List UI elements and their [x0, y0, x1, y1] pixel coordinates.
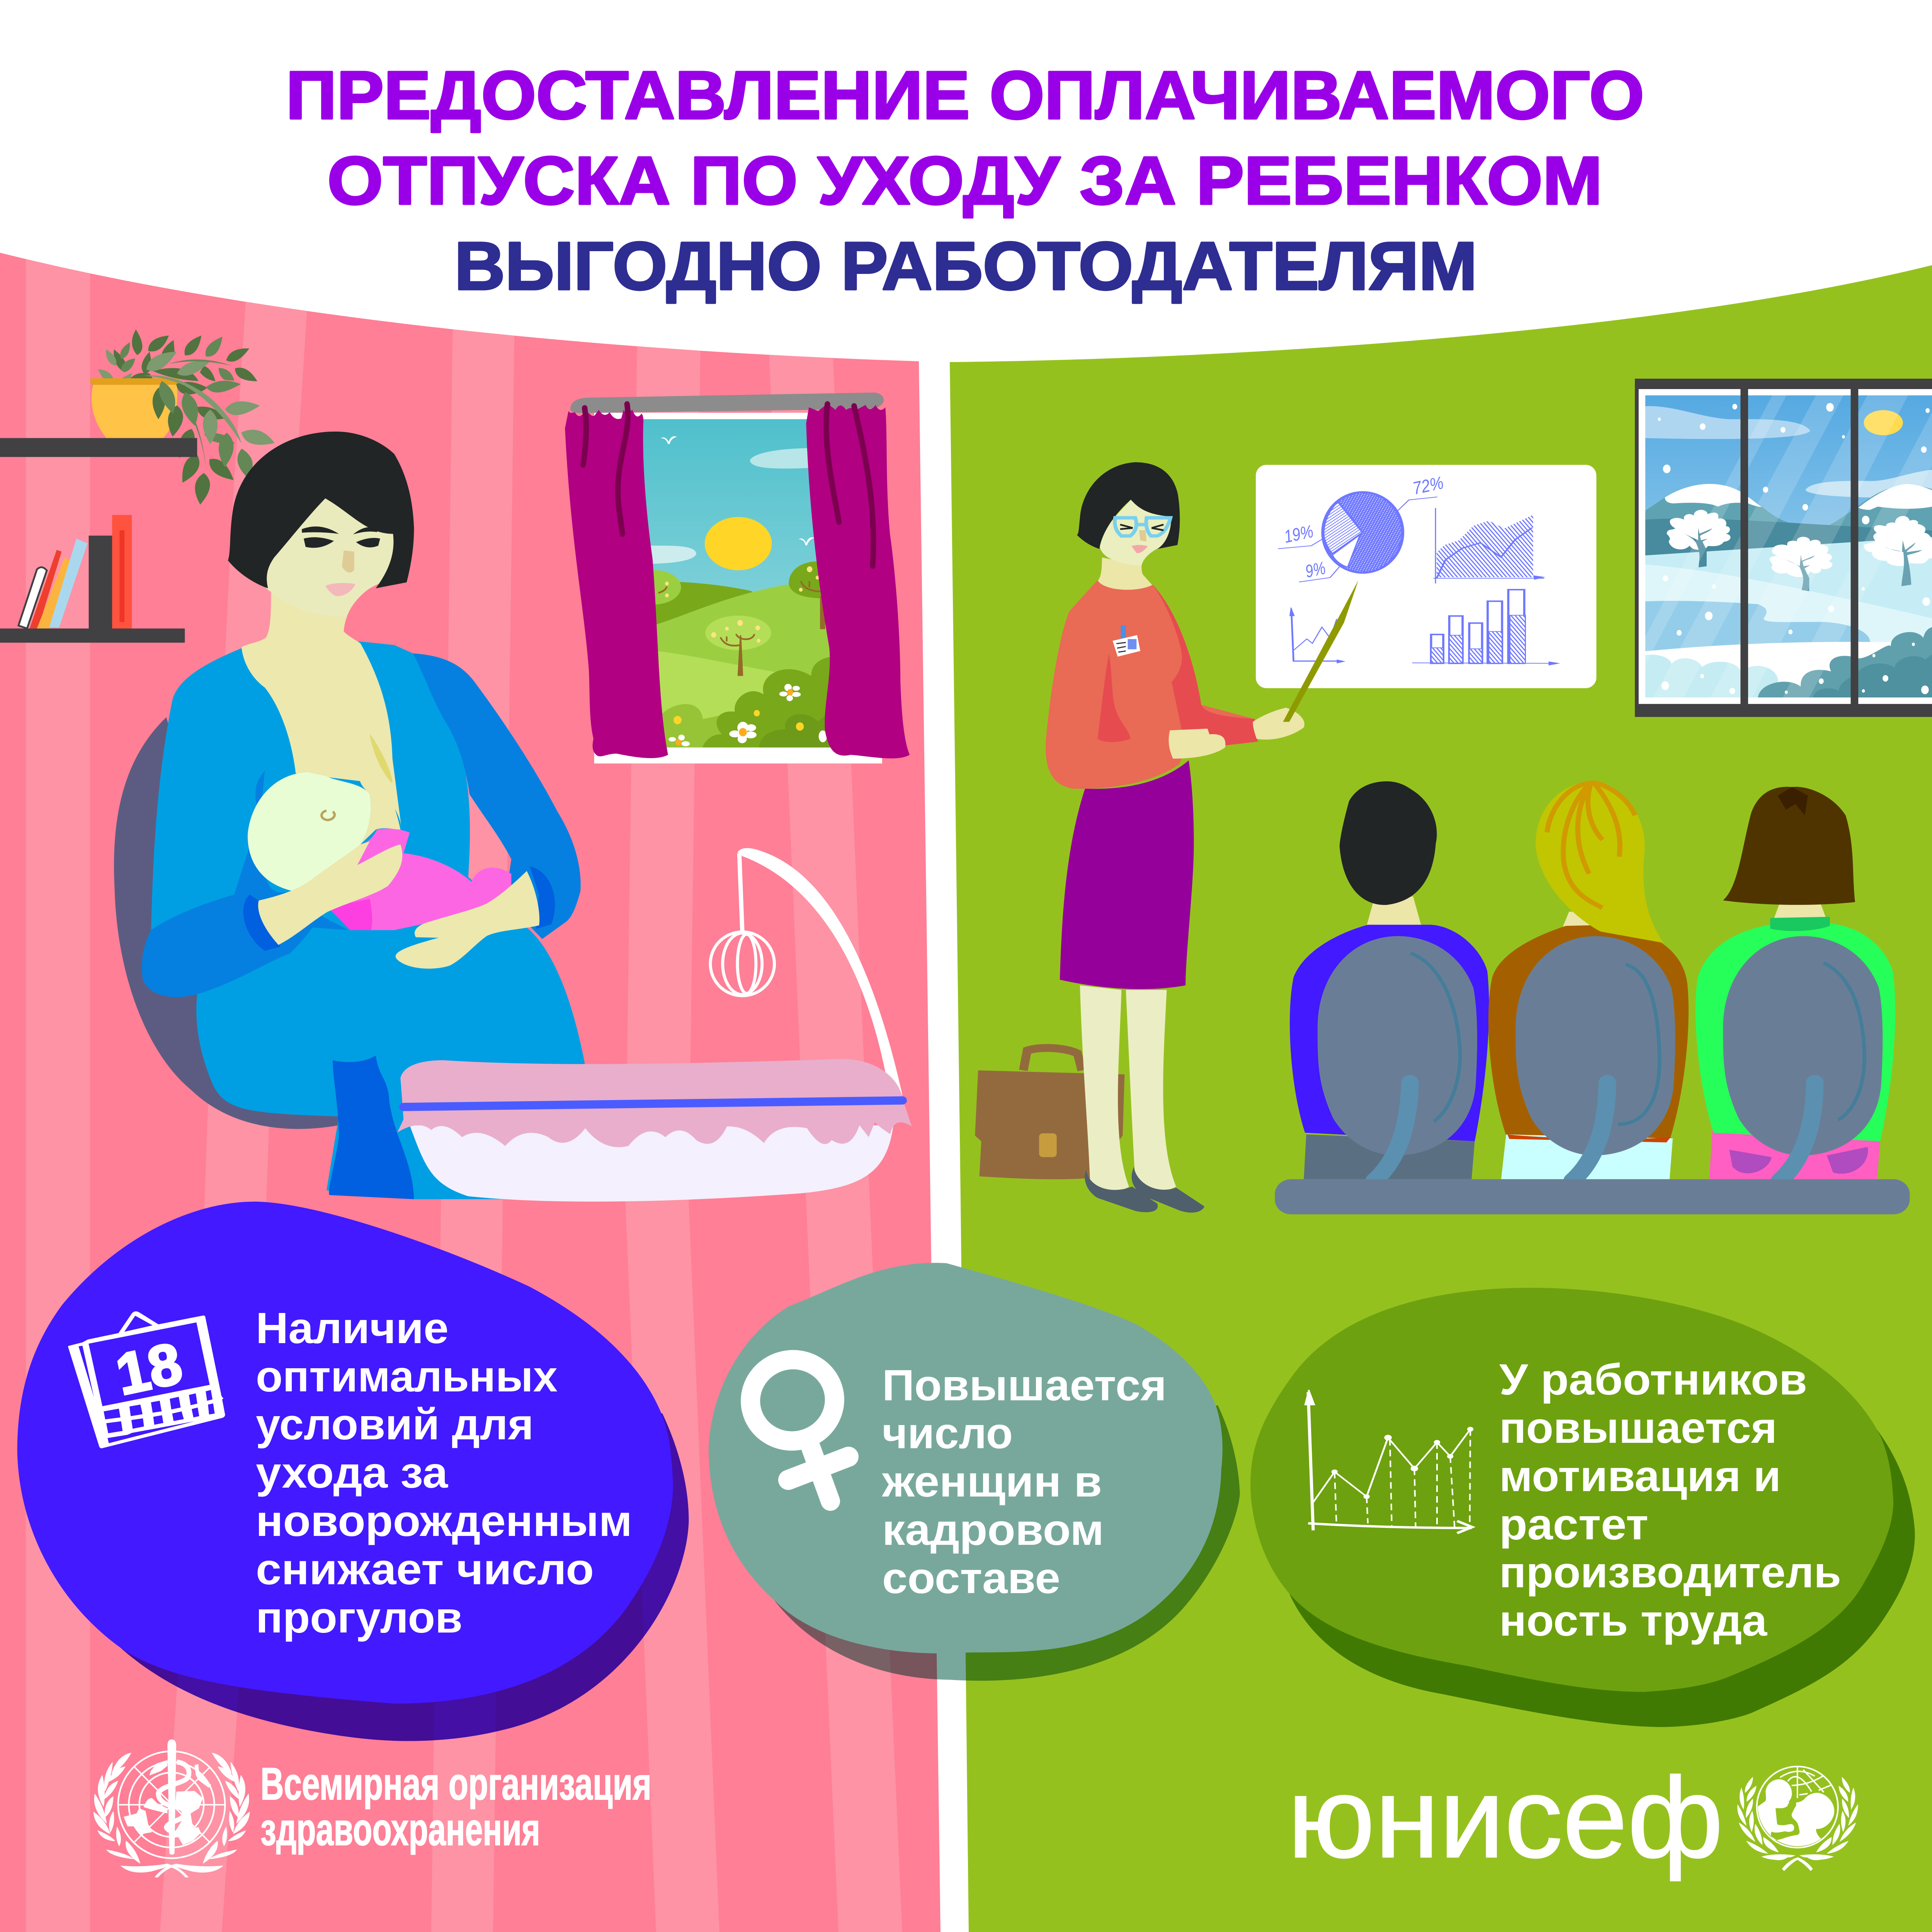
text block: teal callout: число	[882, 1409, 1013, 1458]
baby head	[248, 772, 371, 892]
potted plant on shelf	[90, 330, 275, 505]
whiteboard with charts	[1256, 465, 1596, 688]
snowflakes	[1658, 403, 1930, 694]
dress	[151, 641, 585, 1199]
callout: green blob	[1250, 1288, 1893, 1692]
left cuff	[243, 895, 280, 951]
panel: pink nursery wall	[0, 232, 940, 1932]
callout: blue blob	[17, 1202, 673, 1704]
far hills	[1645, 485, 1932, 552]
face	[1099, 500, 1171, 566]
clouds	[1645, 406, 1810, 439]
text block: green callout: производитель	[1499, 1548, 1841, 1597]
briefcase	[975, 1048, 1124, 1179]
sun	[1864, 410, 1903, 435]
student two	[1488, 781, 1689, 1181]
text block: blue callout: условий для	[256, 1400, 534, 1449]
summer window with curtains	[565, 393, 910, 764]
text block: teal callout: составе	[882, 1554, 1060, 1602]
area chart	[1433, 508, 1545, 583]
text block: teal callout: кадровом	[882, 1505, 1104, 1554]
text block: blue callout: новорожденным	[256, 1497, 632, 1545]
hair	[228, 432, 414, 588]
hair	[1077, 462, 1180, 549]
foreground snow	[1645, 642, 1932, 697]
mother breastfeeding baby	[114, 432, 585, 1199]
text block: teal callout	[882, 1361, 1167, 1602]
text block: green callout	[1499, 1355, 1841, 1645]
inner sleeve	[234, 770, 348, 930]
title: ПРЕДОСТАВЛЕНИЕ ОПЛАЧИВАЕМОГО	[286, 58, 1644, 133]
UNICEF laurel leaves	[1737, 1777, 1858, 1871]
bar chart	[1412, 590, 1560, 665]
mouth	[1131, 545, 1148, 553]
window mullions	[1740, 379, 1858, 717]
teacher presenting	[975, 462, 1304, 1213]
pointer	[1283, 580, 1359, 722]
text block: blue callout: ухода за	[256, 1448, 448, 1497]
pie chart labels: 9%	[1303, 558, 1327, 582]
title: ВЫГОДНО РАБОТОДАТЕЛЯМ	[454, 228, 1477, 304]
pie chart labels: 72%	[1411, 472, 1445, 498]
logo: WHO emblem	[94, 1740, 250, 1878]
wall shelves with books	[0, 438, 197, 643]
logo: UNICEF emblem	[1737, 1767, 1858, 1871]
eyes	[1120, 525, 1163, 530]
nose	[342, 550, 354, 573]
callout: teal blob shadow	[754, 1405, 1240, 1681]
legs	[1080, 985, 1176, 1192]
far leg	[329, 1056, 414, 1199]
neck	[1097, 558, 1153, 590]
text block: green callout: У работников	[1499, 1355, 1807, 1404]
pie chart	[1278, 492, 1437, 582]
icon: female symbol	[743, 1352, 849, 1501]
icon: line chart	[1305, 1390, 1473, 1533]
line chart	[1289, 607, 1345, 663]
glasses	[1115, 518, 1170, 536]
left sleeve	[142, 892, 314, 997]
sweater shade	[1153, 585, 1258, 746]
text block: blue callout: прогулов	[256, 1593, 463, 1642]
sweater	[1046, 580, 1255, 789]
lips	[325, 583, 355, 596]
seated audience	[1275, 781, 1910, 1214]
text block: teal callout: женщин в	[882, 1457, 1102, 1506]
right hand	[396, 871, 539, 969]
snowy trees	[1667, 510, 1932, 577]
text block: green callout: растет	[1499, 1500, 1648, 1549]
icon: wall calendar	[68, 1311, 225, 1448]
logo text: WHO: Всемирная организация	[260, 1759, 651, 1810]
sleeve fold	[1097, 654, 1130, 742]
mid band	[1645, 519, 1932, 555]
text block: blue callout: снижает число	[256, 1545, 594, 1594]
left hand	[258, 842, 402, 945]
text block: green callout: ность труда	[1499, 1596, 1767, 1645]
callout: green blob shadow	[1289, 1430, 1915, 1727]
text block: blue callout: Наличие	[256, 1304, 449, 1352]
nose	[1139, 530, 1146, 542]
right sleeve	[413, 653, 581, 939]
pie chart labels	[1282, 472, 1445, 582]
text block: green callout: мотивация и	[1499, 1452, 1781, 1500]
logo text: UNICEF: юнисеф	[1287, 1753, 1723, 1882]
WHO laurel leaves	[94, 1753, 250, 1878]
eyes	[302, 526, 380, 548]
breast shade	[370, 734, 393, 784]
logo text: WHO	[260, 1759, 651, 1855]
chest	[242, 587, 402, 830]
cradle	[397, 1059, 912, 1202]
text block: blue callout: оптимальных	[256, 1352, 558, 1401]
student three	[1696, 787, 1895, 1181]
baby diaper	[328, 899, 372, 930]
callout: blue blob shadow	[120, 1413, 689, 1741]
glass reflections	[1645, 395, 1932, 697]
student one	[1290, 781, 1489, 1181]
text block: teal callout: Повышается	[882, 1361, 1167, 1410]
title	[286, 58, 1644, 304]
snow field	[1645, 537, 1932, 648]
text block: green callout: повышается	[1499, 1403, 1777, 1452]
skirt	[1060, 760, 1194, 989]
hands	[1169, 707, 1304, 759]
name badge	[1113, 626, 1140, 656]
pie chart labels: 19%	[1282, 521, 1315, 547]
baby body	[327, 828, 511, 930]
calendar date: 18	[111, 1330, 187, 1407]
bench	[1275, 1179, 1910, 1214]
face	[262, 498, 397, 617]
bushes	[1645, 655, 1779, 697]
baby face at breast	[359, 767, 400, 844]
title: ОТПУСКА ПО УХОДУ ЗА РЕБЕНКОМ	[327, 143, 1602, 219]
shoes	[1085, 1167, 1204, 1213]
winter window	[1635, 379, 1932, 717]
armchair	[114, 717, 345, 1129]
callout: teal blob	[709, 1263, 1223, 1653]
right cuff	[530, 866, 555, 929]
cradle mobile	[710, 848, 903, 1096]
panel: green office wall	[950, 265, 1932, 1932]
logo text: WHO: здравоохранения	[260, 1804, 540, 1855]
baby ear	[321, 811, 335, 820]
text block: blue callout	[256, 1304, 632, 1642]
